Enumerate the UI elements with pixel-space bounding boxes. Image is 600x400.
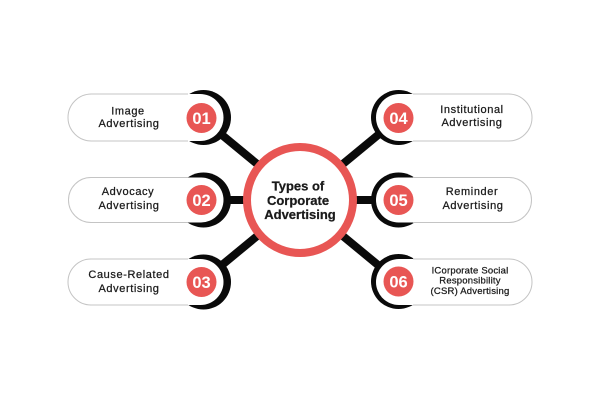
item 06: Corporate Social Responsibility Advertising: Responsibility	[439, 276, 501, 286]
item 01: Image Advertising: Image	[111, 106, 145, 118]
item 03: Cause-Related Advertising: Cause-Related	[88, 269, 170, 281]
item 01: Image Advertising: 01	[192, 110, 211, 128]
center hub: Advertising	[264, 207, 336, 222]
item 05: Reminder Advertising: Advertising	[442, 200, 504, 212]
item 06: Corporate Social Responsibility Advertising	[371, 254, 532, 309]
item 01: Image Advertising	[68, 90, 231, 145]
item 04: Institutional Advertising	[371, 90, 532, 145]
item 02: Advocacy Advertising: 02	[192, 192, 211, 210]
item 02: Advocacy Advertising	[68, 172, 231, 228]
center hub	[247, 147, 353, 253]
item 02: Advocacy Advertising: Advertising	[98, 200, 160, 212]
item 05: Reminder Advertising	[371, 172, 532, 228]
item 04: Institutional Advertising: 04	[389, 110, 408, 128]
center hub: Types of	[272, 178, 325, 194]
item 06: Corporate Social Responsibility Advertising: 06	[389, 274, 408, 292]
item 03: Cause-Related Advertising	[68, 254, 231, 310]
item 06: Corporate Social Responsibility Advertising: ICorporate Social	[432, 266, 508, 276]
item 05: Reminder Advertising: 05	[389, 192, 408, 210]
item 04: Institutional Advertising: Institutional	[440, 104, 504, 116]
connector lines	[222, 135, 378, 265]
item 01: Image Advertising: Advertising	[98, 118, 160, 130]
item 03: Cause-Related Advertising: 03	[192, 274, 211, 292]
item 03: Cause-Related Advertising: Advertising	[98, 283, 160, 295]
item 05: Reminder Advertising: Reminder	[446, 186, 498, 198]
center hub: Corporate	[267, 193, 329, 208]
item 06: Corporate Social Responsibility Advertising: (CSR) Advertising	[431, 286, 509, 297]
item 04: Institutional Advertising: Advertising	[441, 117, 503, 129]
item 02: Advocacy Advertising: Advocacy	[102, 186, 154, 198]
